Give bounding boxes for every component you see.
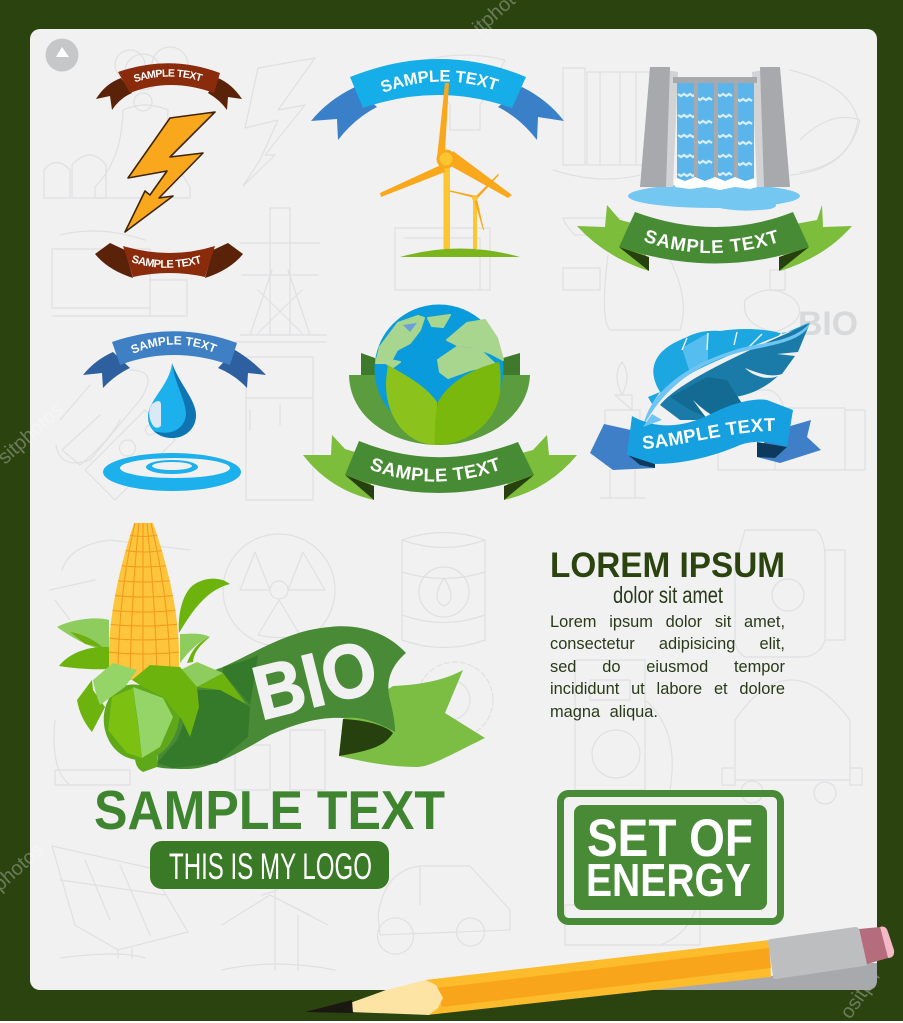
icon: wind turbines bbox=[380, 83, 520, 257]
ribbon: feather blue: SAMPLE TEXT bbox=[643, 418, 775, 449]
ribbon: BIO banner bbox=[157, 624, 485, 769]
ribbon: BIO banner: BIO bbox=[245, 624, 386, 737]
title: sample text: SAMPLE TEXT bbox=[94, 779, 445, 841]
badge: set of energy: SET OF bbox=[587, 809, 753, 868]
body text: incididunt ut labore et dolore bbox=[550, 680, 785, 698]
icon: hydro dam bbox=[628, 67, 800, 211]
badge: set of energy bbox=[560, 794, 780, 922]
ribbon: green globe: SAMPLE TEXT bbox=[370, 457, 498, 482]
icon: lightning bolt bbox=[125, 112, 215, 232]
ribbon: water blue: SAMPLE TEXT bbox=[131, 336, 218, 353]
ribbon: water blue bbox=[83, 331, 266, 388]
ribbon: brown top: SAMPLE TEXT bbox=[134, 69, 203, 82]
ribbon: green dam: SAMPLE TEXT bbox=[644, 230, 777, 254]
ribbon: feather blue bbox=[590, 400, 821, 470]
body text: Lorem ipsum dolor sit amet, bbox=[550, 613, 785, 631]
ribbon: green dam bbox=[577, 205, 852, 271]
body text bbox=[550, 611, 785, 727]
ribbon: brown bottom: SAMPLE TEXT bbox=[132, 255, 200, 268]
heading: lorem ipsum: LOREM IPSUM bbox=[550, 546, 785, 585]
ribbon: brown top bbox=[96, 63, 242, 110]
icon: corn cob bbox=[57, 523, 246, 772]
icon: water drop bbox=[148, 363, 196, 438]
icon: feather bbox=[643, 322, 810, 427]
badge: set of energy: ENERGY bbox=[586, 854, 751, 906]
body text: sed do eiusmod tempor bbox=[550, 658, 785, 676]
subheading: dolor sit amet bbox=[613, 582, 723, 608]
icon: corner badge bbox=[46, 38, 78, 72]
body text: magna aliqua. bbox=[550, 703, 658, 721]
ribbon: green globe bbox=[303, 435, 577, 500]
background icon: grey BIO word: BIO bbox=[798, 305, 858, 343]
icon: water ripples bbox=[103, 453, 241, 491]
ribbon: brown bottom bbox=[95, 243, 243, 278]
icon: pencil bbox=[305, 927, 894, 1015]
ribbon: blue wind bbox=[311, 59, 564, 140]
ribbon: blue wind: SAMPLE TEXT bbox=[381, 70, 500, 92]
watermark text: ositph bbox=[836, 967, 885, 1023]
icon: globe in leaves bbox=[349, 304, 530, 445]
logo pill: THIS IS MY LOGO bbox=[169, 846, 372, 887]
logo pill bbox=[150, 841, 389, 889]
body text: consectetur adipisicing elit, bbox=[550, 635, 785, 653]
